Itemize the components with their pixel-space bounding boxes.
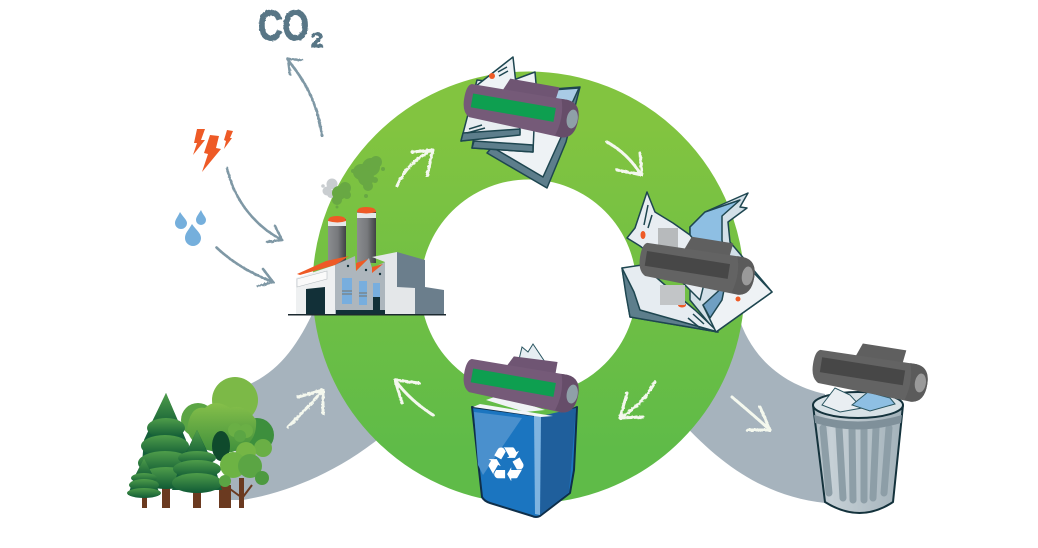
lower-left sheet	[622, 265, 718, 332]
blue paper in can	[852, 392, 895, 411]
orange roofs	[297, 256, 383, 275]
cartridge: collected, on bin	[460, 346, 583, 415]
icon: crumpled paper	[622, 192, 772, 332]
cartridge: new, top	[460, 71, 583, 140]
icon: factory	[288, 207, 446, 316]
cartridge: used, on trash can	[810, 336, 932, 404]
icon: stacked paper	[461, 57, 580, 188]
right grey flow band	[680, 315, 825, 503]
side door and base	[373, 297, 380, 314]
blue back sheet	[690, 193, 772, 332]
left white hall	[296, 265, 335, 314]
annex and dark side wall	[397, 252, 444, 314]
white arrow: new cartridge to used	[607, 142, 642, 175]
small round tree	[219, 439, 272, 497]
left grey flow band	[225, 308, 395, 500]
white arrow: used to trash	[732, 397, 770, 430]
white arrow: used to recycling bin	[620, 382, 655, 418]
large broadleaf tree	[181, 377, 274, 461]
garage door	[306, 287, 325, 314]
icon: lightning bolts	[193, 129, 233, 172]
can body	[813, 405, 903, 513]
icon: smoke	[321, 156, 385, 208]
paper in can	[822, 388, 862, 412]
arrow: water to factory	[217, 248, 273, 286]
CO2 label: 2	[311, 29, 323, 52]
bin highlight	[474, 412, 522, 475]
lower-right sheet	[703, 272, 772, 332]
tall pine	[138, 393, 194, 489]
white arrow: factory to new cartridge	[397, 150, 433, 186]
left chimney	[328, 216, 346, 265]
small pine	[127, 458, 161, 498]
trunks	[142, 478, 244, 508]
right chimney	[357, 207, 376, 263]
awning	[297, 271, 327, 287]
can opening	[813, 392, 903, 418]
green recycling ring	[366, 126, 690, 450]
white block	[372, 252, 415, 314]
icon: trees	[127, 377, 274, 508]
vent dots	[347, 265, 381, 275]
upper-left sheet	[627, 192, 710, 300]
bin body	[472, 407, 577, 517]
CO2 label: CO	[258, 2, 309, 50]
windows	[342, 278, 380, 305]
paper in bin	[508, 344, 545, 405]
can rim band	[814, 415, 902, 430]
arrow: energy to factory	[227, 168, 282, 242]
ground line	[288, 314, 446, 316]
middle pine	[172, 430, 222, 493]
bin right side	[540, 408, 576, 515]
arrow: factory to CO2	[288, 59, 322, 136]
cartridge: used, on crumpled paper	[637, 229, 759, 297]
icon: trash can	[813, 388, 903, 513]
grey central facade	[335, 256, 385, 314]
can ribs	[823, 428, 889, 500]
icon: water drops	[175, 210, 206, 246]
icon: recycling bin	[472, 344, 577, 517]
recycling symbol: ♻	[484, 437, 528, 493]
white arrow: recycling bin to factory	[395, 380, 433, 415]
bin rim	[473, 404, 553, 417]
white arrow: trees to factory	[288, 390, 323, 427]
